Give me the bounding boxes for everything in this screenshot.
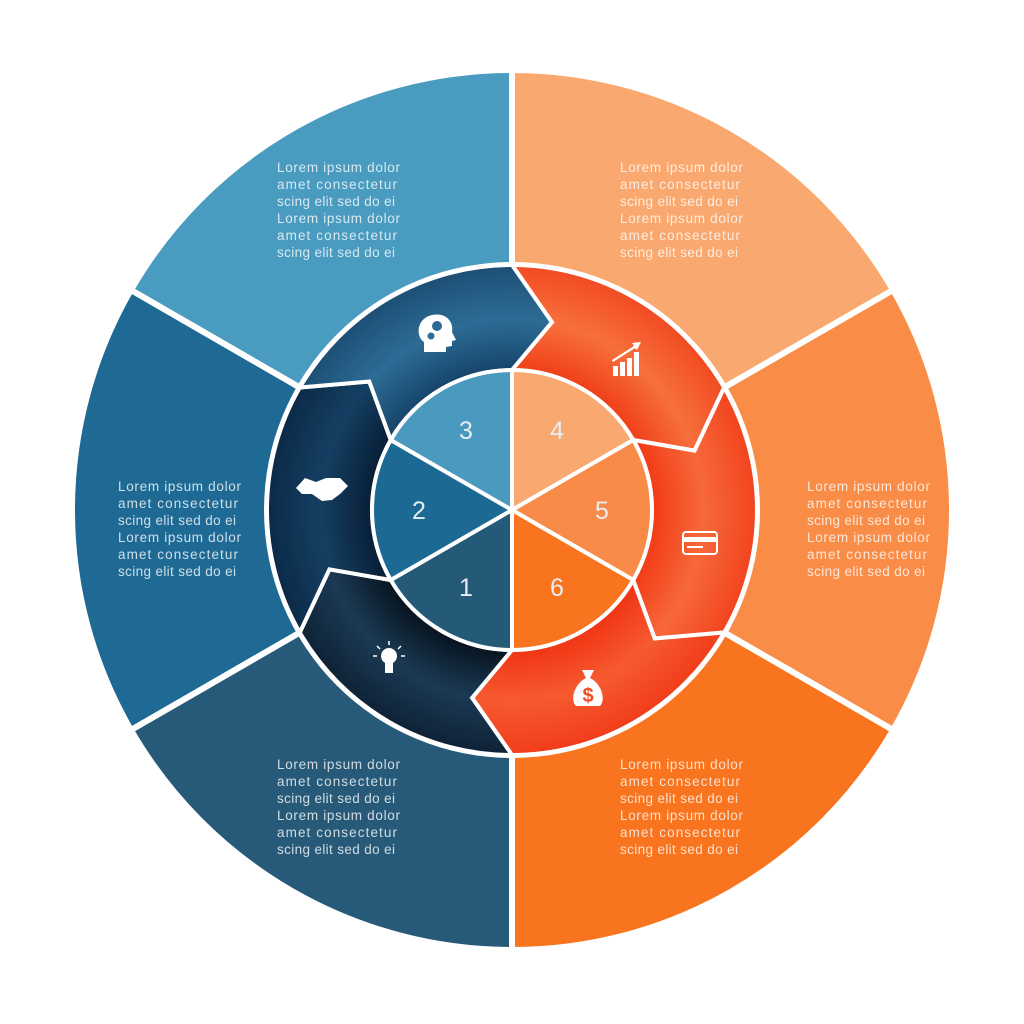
arrow ring xyxy=(194,204,830,816)
icon: head with gears xyxy=(419,314,456,352)
arrow 4 xyxy=(512,265,724,451)
text: right xyxy=(807,479,930,579)
text: top-right xyxy=(620,160,744,260)
sector 3 xyxy=(391,335,573,510)
text: left: scing elit sed do ei xyxy=(118,513,236,528)
step numbers: 2 xyxy=(412,497,426,525)
text: right: amet consectetur xyxy=(807,547,928,562)
step numbers xyxy=(412,417,609,602)
text: left: amet consectetur xyxy=(118,547,238,562)
arrow 2 xyxy=(194,356,461,632)
text: bottom-right: Lorem ipsum dolor xyxy=(620,757,744,772)
ring border xyxy=(264,262,760,758)
text: top-right: Lorem ipsum dolor xyxy=(620,160,744,175)
step numbers: 3 xyxy=(459,417,473,445)
sector 5 xyxy=(512,440,694,615)
text: top-right: scing elit sed do ei xyxy=(620,245,738,260)
text: top-right: scing elit sed do ei xyxy=(620,194,738,209)
text blocks xyxy=(118,160,930,857)
text: left: scing elit sed do ei xyxy=(118,564,236,579)
icon: money bag: $ xyxy=(582,685,594,707)
text: top-right: Lorem ipsum dolor xyxy=(620,211,744,226)
text: left: Lorem ipsum dolor xyxy=(118,479,242,494)
icon: credit card xyxy=(683,532,717,554)
icon: money bag xyxy=(573,670,603,707)
text: bottom-right: amet consectetur xyxy=(620,825,740,840)
inner pie xyxy=(330,335,694,685)
text: bottom-left: scing elit sed do ei xyxy=(277,842,395,857)
text: left: Lorem ipsum dolor xyxy=(118,530,242,545)
panel: top-left outer xyxy=(131,0,703,510)
step numbers: 6 xyxy=(550,574,564,602)
step numbers: 5 xyxy=(595,497,609,525)
text: bottom-left: Lorem ipsum dolor xyxy=(277,808,400,823)
text: top-left xyxy=(277,160,400,260)
step numbers: 4 xyxy=(550,417,564,445)
text: left: amet consectetur xyxy=(118,496,238,511)
text: bottom-right: Lorem ipsum dolor xyxy=(620,808,744,823)
arrow 5 xyxy=(563,388,830,664)
text: top-left: scing elit sed do ei xyxy=(277,194,395,209)
text: bottom-right: scing elit sed do ei xyxy=(620,791,738,806)
text: top-left: scing elit sed do ei xyxy=(277,245,395,260)
text: bottom-left xyxy=(277,757,400,857)
text: bottom-left: amet consectetur xyxy=(277,825,398,840)
sector 6 xyxy=(451,510,633,685)
arrow 3 xyxy=(300,204,567,480)
sector 2 xyxy=(330,405,512,580)
text: right: scing elit sed do ei xyxy=(807,564,925,579)
text: top-left: amet consectetur xyxy=(277,177,398,192)
icon: light bulb xyxy=(373,641,405,673)
text: bottom-right: scing elit sed do ei xyxy=(620,842,738,857)
icon: growth chart xyxy=(612,342,641,376)
text: right: Lorem ipsum dolor xyxy=(807,530,930,545)
text: bottom-left: scing elit sed do ei xyxy=(277,791,395,806)
text: top-right: amet consectetur xyxy=(620,228,740,243)
text: right: Lorem ipsum dolor xyxy=(807,479,930,494)
text: right: scing elit sed do ei xyxy=(807,513,925,528)
text: bottom-left: Lorem ipsum dolor xyxy=(277,757,400,772)
text: bottom-left: amet consectetur xyxy=(277,774,398,789)
text: bottom-right xyxy=(620,757,744,857)
arrow 6 xyxy=(457,540,724,816)
text: top-left: Lorem ipsum dolor xyxy=(277,160,400,175)
icon: handshake xyxy=(296,478,348,501)
panel: bottom-right outer xyxy=(321,510,893,1024)
panel: top-right outer xyxy=(512,70,893,510)
text: top-right: amet consectetur xyxy=(620,177,740,192)
text: left xyxy=(118,479,242,579)
text: top-left: Lorem ipsum dolor xyxy=(277,211,400,226)
text: top-left: amet consectetur xyxy=(277,228,398,243)
text: right: amet consectetur xyxy=(807,496,928,511)
arrow 1 xyxy=(300,569,512,755)
panel: bottom-left outer xyxy=(131,510,512,950)
step numbers: 1 xyxy=(459,574,473,602)
text: bottom-right: amet consectetur xyxy=(620,774,740,789)
panel: left outer xyxy=(0,180,512,730)
sector 1 xyxy=(391,510,512,650)
panel: right outer xyxy=(512,290,1024,840)
sector 4 xyxy=(512,370,633,510)
